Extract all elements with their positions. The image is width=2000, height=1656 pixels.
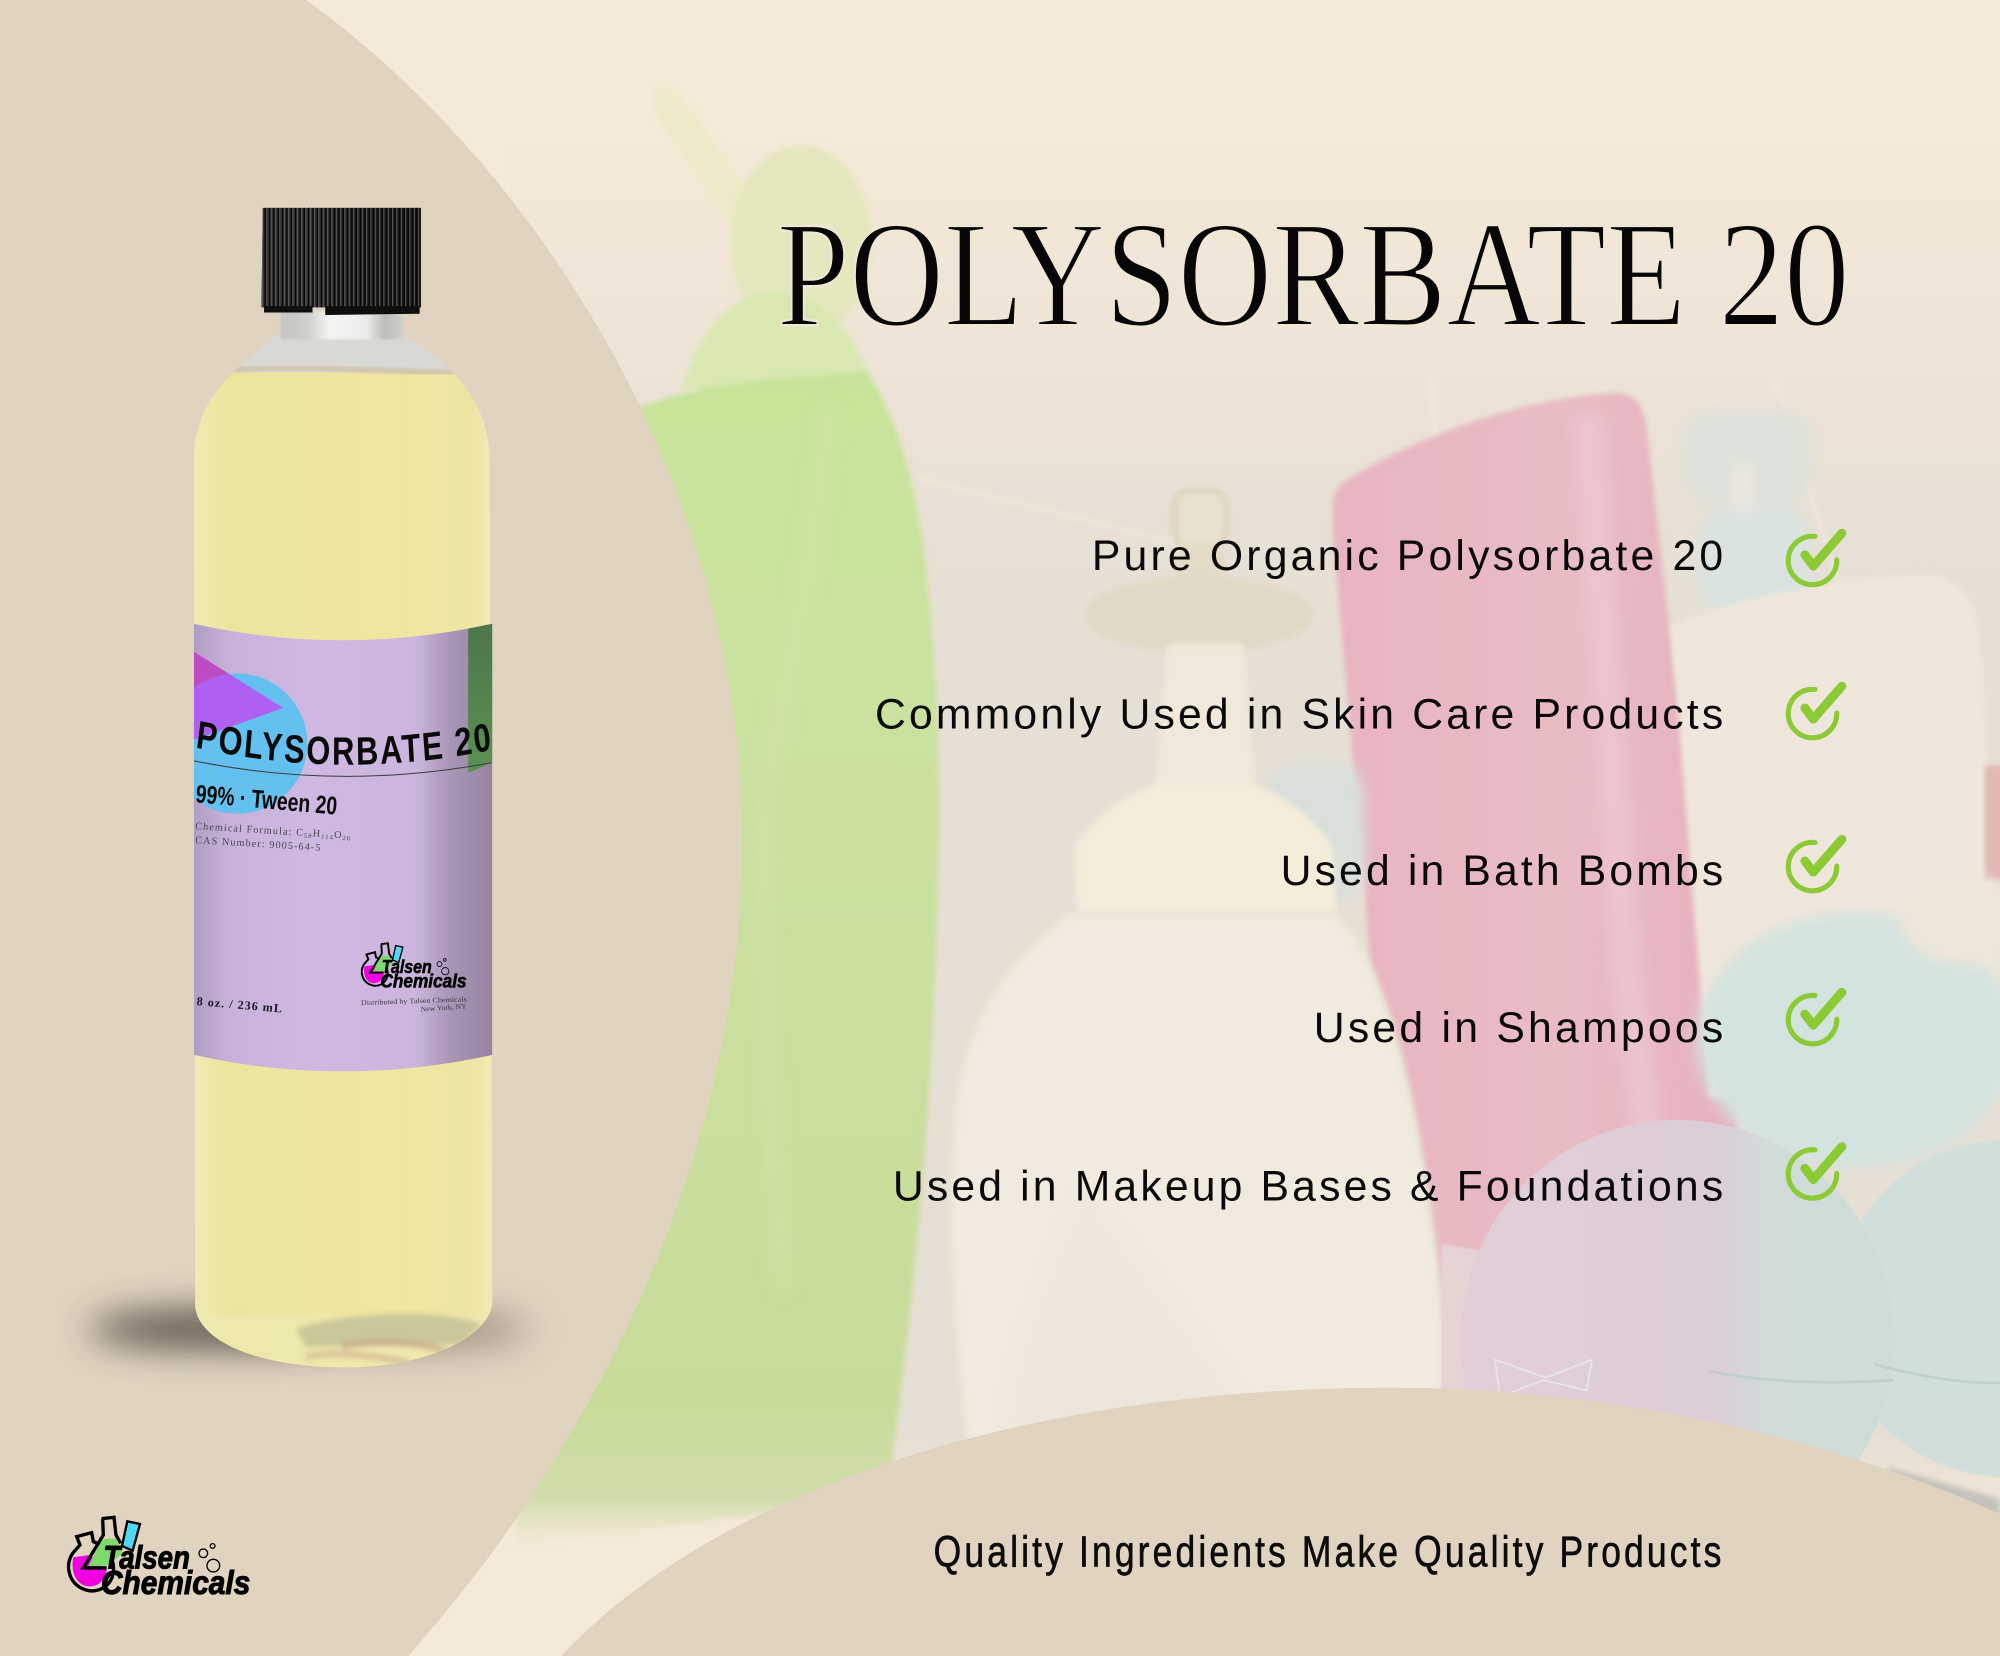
volume: 8 oz. / 236 mL — [196, 994, 284, 1016]
triangle overlap — [194, 674, 283, 740]
foam bottle shadow facet — [1008, 1199, 1276, 1454]
product bottle — [194, 208, 492, 1368]
magenta triangle — [194, 652, 229, 688]
logo: Talsen Chemicals — [69, 1517, 250, 1602]
pink bottle highlight — [1588, 415, 1665, 1276]
pink accent far right — [1985, 765, 2000, 880]
blue pump, back right — [1684, 411, 1811, 619]
green bottle highlight — [764, 408, 829, 1288]
dark lower right corner — [1888, 1467, 2000, 1531]
bottle glass body — [194, 334, 492, 1367]
background photo: faded cosmetic bottles — [510, 86, 2000, 1559]
label logo: Talsen — [382, 956, 432, 977]
tagline: Quality Ingredients Make Quality Products — [934, 1528, 1724, 1576]
benefit 2: Commonly Used in Skin Care Products — [875, 690, 1723, 738]
icon: check 3 — [1788, 839, 1842, 891]
distributor text: New York, NY — [420, 1002, 467, 1013]
blue shape behind foam bottle — [1263, 763, 1365, 903]
benefit 5: Used in Makeup Bases & Foundations — [893, 1162, 1723, 1210]
bottle shadow — [89, 1309, 529, 1349]
icon: check 1 — [1788, 533, 1842, 585]
benefit 3: Used in Bath Bombs — [1281, 847, 1723, 895]
title: POLYSORBATE 20 — [777, 190, 1849, 358]
label title: POLYSORBATE 20 — [197, 721, 490, 765]
neck — [281, 311, 403, 339]
blue circle — [194, 674, 308, 814]
distributor text — [361, 996, 466, 1012]
chemical formula: Chemical Formula: C — [195, 821, 304, 839]
benefit 1: Pure Organic Polysorbate 20 — [1092, 532, 1723, 580]
benefits list — [875, 532, 1723, 1210]
benefit 4: Used in Shampoos — [1314, 1004, 1723, 1052]
chemical formula: H — [312, 828, 322, 840]
logo: Talsen Chemicals: Talsen — [103, 1539, 190, 1576]
icon: check 5 — [1788, 1147, 1842, 1198]
label logo — [362, 943, 467, 993]
green strip — [468, 612, 492, 773]
label rule — [194, 761, 491, 776]
label subtitle: 99% · Tween 20 — [195, 779, 338, 820]
foam pump bottle — [951, 491, 1443, 1467]
purple bath bomb — [1460, 1120, 2000, 1559]
green bottle — [510, 86, 939, 1543]
logo: Talsen Chemicals: Chemicals — [101, 1565, 250, 1602]
label — [194, 624, 492, 1072]
liquid — [191, 367, 497, 1380]
icon: check 4 — [1788, 992, 1842, 1044]
chemical formula: 114 — [321, 834, 334, 841]
teal bath bomb — [1837, 1140, 2000, 1477]
bowl — [1441, 1244, 1750, 1422]
chemical formula: 26 — [342, 835, 351, 843]
chemical formula: O — [334, 830, 343, 841]
white bottle, right — [1671, 574, 2000, 1097]
blue bath puff — [1696, 878, 2000, 1167]
cap — [261, 208, 421, 315]
bottom curved panel — [561, 1388, 2000, 1656]
distributor text: Distributed by Talsen Chemicals — [361, 995, 467, 1007]
left curved panel — [0, 0, 742, 1656]
CAS number: CAS Number: 9005-64-5 — [195, 835, 322, 854]
pink bottle — [1333, 393, 1750, 1416]
label logo: Chemicals — [380, 972, 467, 993]
icon: check 2 — [1788, 686, 1842, 738]
chemical formula: 58 — [304, 833, 313, 840]
